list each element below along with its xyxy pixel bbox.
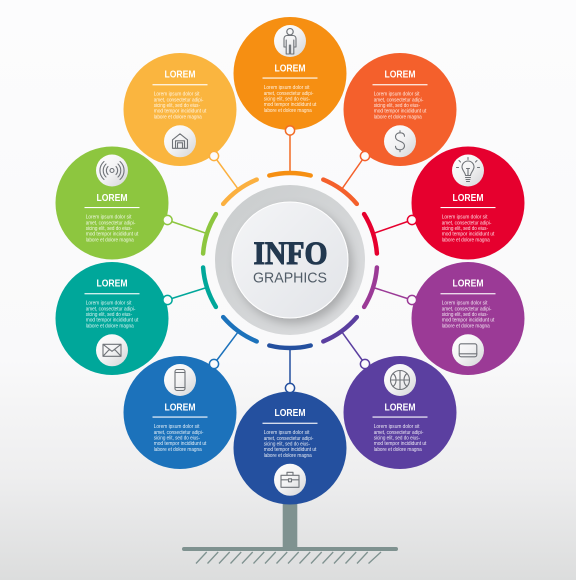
text block: amet, consectetur adipi- (264, 436, 314, 442)
text block: Lorem ipsum dolor sit (86, 301, 132, 307)
text block: sicing elit, sed do eius- (264, 96, 310, 102)
center hub (215, 185, 365, 335)
text block: Lorem ipsum dolor sit (264, 430, 310, 436)
text block: amet, consectetur adipi- (154, 430, 204, 436)
text block: Lorem ipsum dolor sit (442, 215, 488, 221)
text block: amet, consectetur adipi- (154, 97, 204, 103)
text block: amet, consectetur adipi- (442, 220, 492, 226)
text block: mod tempor incididunt ut (154, 441, 207, 447)
text block: mod tempor incididunt ut (86, 232, 139, 238)
text block: Lorem ipsum dolor sit (374, 424, 420, 430)
panel: red-orange (344, 53, 456, 166)
text block: sicing elit, sed do eius- (86, 226, 132, 232)
heading: LOREM (96, 193, 128, 204)
panel: purple (412, 262, 524, 375)
icon: wireless signal (96, 154, 128, 186)
panel: violet (344, 356, 456, 469)
divider (440, 207, 496, 208)
icon: briefcase (274, 464, 306, 496)
panel: green (56, 146, 168, 260)
text block: amet, consectetur adipi- (264, 91, 314, 97)
text block: mod tempor incididunt ut (374, 441, 427, 447)
divider (262, 78, 318, 79)
text block: amet, consectetur adipi- (374, 430, 424, 436)
heading: LOREM (384, 402, 416, 413)
text block (442, 301, 495, 329)
text block (442, 215, 495, 243)
text block: labore et dolore magna (154, 114, 202, 120)
text block: sicing elit, sed do eius- (86, 312, 132, 318)
connector lines (167, 130, 412, 388)
divider (262, 423, 318, 424)
text block (264, 85, 317, 114)
subtitle: GRAPHICS: GRAPHICS (253, 270, 327, 287)
text block: sicing elit, sed do eius- (374, 103, 420, 109)
heading: LOREM (274, 63, 306, 74)
text block: labore et dolore magna (374, 447, 422, 453)
text block: mod tempor incididunt ut (86, 318, 139, 324)
divider (372, 416, 428, 418)
heading: LOREM (452, 193, 484, 204)
panel: orange top (234, 17, 346, 130)
stand (182, 500, 398, 564)
text block: sicing elit, sed do eius- (442, 226, 488, 232)
icon: person (274, 25, 306, 57)
text block: amet, consectetur adipi- (86, 306, 136, 312)
icon: dollar (384, 125, 416, 157)
text block: labore et dolore magna (374, 114, 422, 120)
text block: sicing elit, sed do eius- (374, 436, 420, 442)
icon: tablet (452, 334, 484, 366)
text block: amet, consectetur adipi- (374, 97, 424, 103)
text block: labore et dolore magna (154, 447, 202, 453)
icon: light bulb (452, 154, 484, 186)
divider (440, 293, 496, 294)
text block: mod tempor incididunt ut (374, 109, 427, 115)
heading: LOREM (384, 69, 416, 80)
text block (374, 424, 427, 453)
text block: Lorem ipsum dolor sit (154, 424, 200, 430)
text block: mod tempor incididunt ut (442, 318, 495, 324)
panel: blue (124, 356, 236, 469)
text block: amet, consectetur adipi- (86, 220, 136, 226)
panel: teal (56, 262, 168, 375)
icon: envelope (96, 334, 128, 366)
text block (86, 215, 139, 243)
panel: yellow (124, 53, 236, 166)
text block (374, 92, 427, 120)
text block: labore et dolore magna (86, 323, 134, 329)
divider (152, 416, 208, 418)
text block: labore et dolore magna (442, 237, 490, 243)
divider (84, 207, 140, 208)
heading: LOREM (96, 278, 128, 289)
connector end rings (163, 126, 417, 393)
text block: sicing elit, sed do eius- (154, 436, 200, 442)
icon: smartphone (164, 364, 196, 396)
text block: labore et dolore magna (86, 237, 134, 243)
ring of arc segments (203, 173, 377, 348)
text block: sicing elit, sed do eius- (442, 312, 488, 318)
text block: sicing elit, sed do eius- (264, 441, 310, 447)
text block: mod tempor incididunt ut (264, 447, 317, 453)
icon: basketball (384, 364, 416, 396)
text block: Lorem ipsum dolor sit (374, 92, 420, 98)
text block: mod tempor incididunt ut (154, 109, 207, 115)
text block: Lorem ipsum dolor sit (86, 215, 132, 221)
text block: amet, consectetur adipi- (442, 306, 492, 312)
heading: LOREM (164, 69, 196, 80)
text block: mod tempor incididunt ut (442, 232, 495, 238)
heading: LOREM (452, 278, 484, 289)
title: INFO: INFO (254, 236, 328, 272)
icon: house (164, 125, 196, 157)
text block (86, 301, 139, 329)
heading: LOREM (274, 408, 306, 419)
text block: mod tempor incididunt ut (264, 102, 317, 108)
text block (154, 92, 207, 120)
text block: Lorem ipsum dolor sit (264, 85, 310, 91)
panel: red (412, 146, 524, 260)
text block: Lorem ipsum dolor sit (154, 92, 200, 98)
text block: labore et dolore magna (264, 453, 312, 459)
text block (154, 424, 207, 453)
divider (152, 84, 208, 85)
text block: labore et dolore magna (442, 323, 490, 329)
text block: sicing elit, sed do eius- (154, 103, 200, 109)
panel: dark blue bottom (234, 392, 346, 504)
divider (372, 84, 428, 85)
heading: LOREM (164, 402, 196, 413)
text block: Lorem ipsum dolor sit (442, 301, 488, 307)
divider (84, 293, 140, 294)
text block: labore et dolore magna (264, 108, 312, 114)
text block (264, 430, 317, 459)
